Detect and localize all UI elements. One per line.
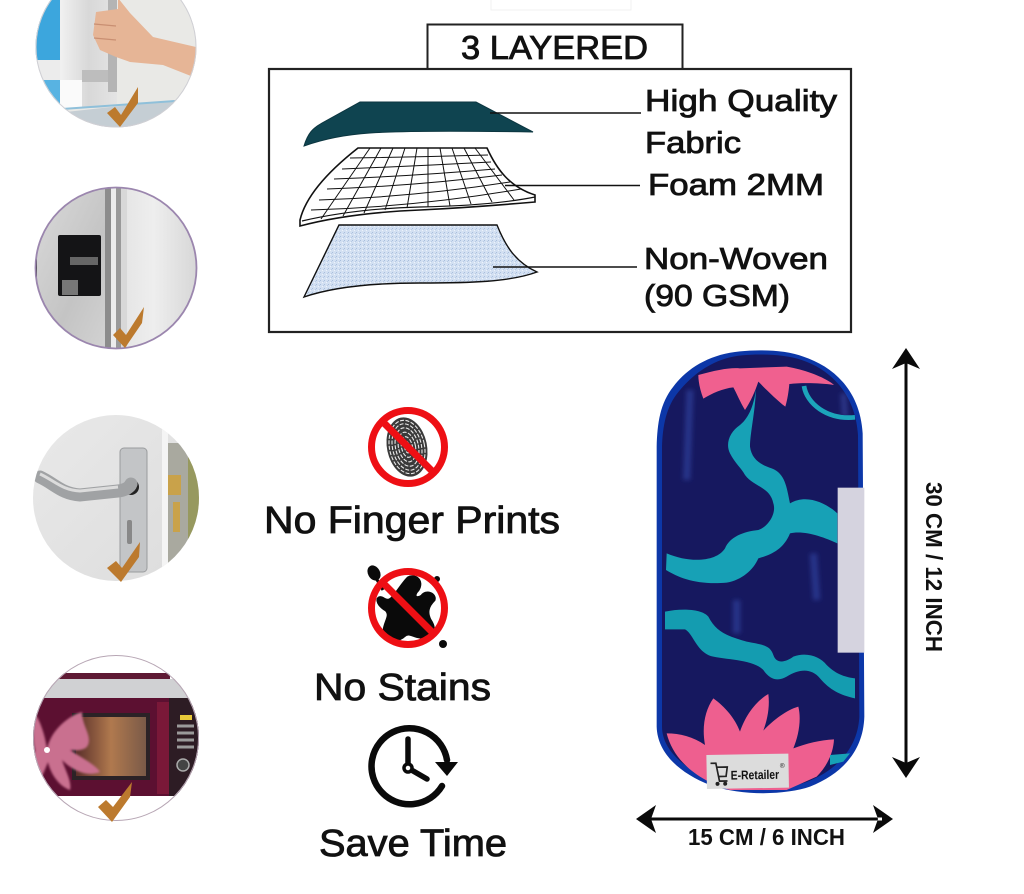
heading tab: 3 LAYERED bbox=[461, 29, 648, 66]
leader lines bbox=[490, 113, 641, 267]
arrow: width bbox=[636, 805, 893, 833]
photo: door handle bbox=[30, 412, 205, 587]
label: high quality fabric: High Quality bbox=[645, 83, 838, 118]
label: foam: Foam 2MM bbox=[648, 167, 824, 202]
brand label: ® bbox=[780, 762, 785, 770]
brand label bbox=[706, 754, 789, 789]
label: height: 30 CM / 12 INCH bbox=[921, 482, 947, 652]
layer: foam grid bbox=[300, 148, 535, 226]
text: no stains: No Stains bbox=[314, 667, 491, 709]
icon: check mark bbox=[98, 782, 132, 822]
product: handle cover bbox=[657, 350, 864, 793]
photo: microwave bbox=[30, 650, 205, 825]
label: non-woven: Non-Woven bbox=[644, 241, 828, 276]
usage photos column bbox=[30, 0, 205, 825]
layer: fabric bbox=[304, 102, 533, 146]
layer: non-woven bbox=[304, 225, 537, 297]
benefits column bbox=[264, 410, 560, 865]
icon: clock bbox=[372, 728, 458, 804]
photo: hand on fridge handle bbox=[36, 0, 196, 128]
label: width: 15 CM / 6 INCH bbox=[688, 824, 845, 850]
brand label: E-Retailer bbox=[731, 768, 779, 783]
arrow: height bbox=[892, 348, 920, 778]
velcro strip bbox=[838, 488, 864, 653]
panel: 3 layered construction bbox=[269, 24, 851, 332]
label: non-woven bbox=[644, 241, 828, 313]
panel border bbox=[269, 69, 851, 332]
photo: side-by-side fridge bbox=[30, 185, 202, 355]
label: high quality fabric: Fabric bbox=[645, 125, 741, 160]
icon: check mark bbox=[107, 87, 138, 127]
label: high quality fabric bbox=[645, 83, 838, 160]
teal ribbon lower bbox=[665, 610, 855, 698]
icon: check mark bbox=[107, 542, 140, 582]
faint top box bbox=[491, 0, 631, 10]
icon: no stains bbox=[365, 563, 447, 648]
text: save time: Save Time bbox=[319, 823, 507, 865]
teal ribbon upper bbox=[666, 389, 837, 583]
label: non-woven: (90 GSM) bbox=[644, 278, 790, 313]
text: no finger prints: No Finger Prints bbox=[264, 500, 560, 542]
icon: check mark bbox=[113, 307, 144, 348]
pink lotus top bbox=[698, 367, 834, 410]
heading tab bbox=[428, 24, 682, 70]
pink lotus bottom bbox=[667, 694, 834, 790]
icon: no finger prints bbox=[372, 410, 444, 484]
